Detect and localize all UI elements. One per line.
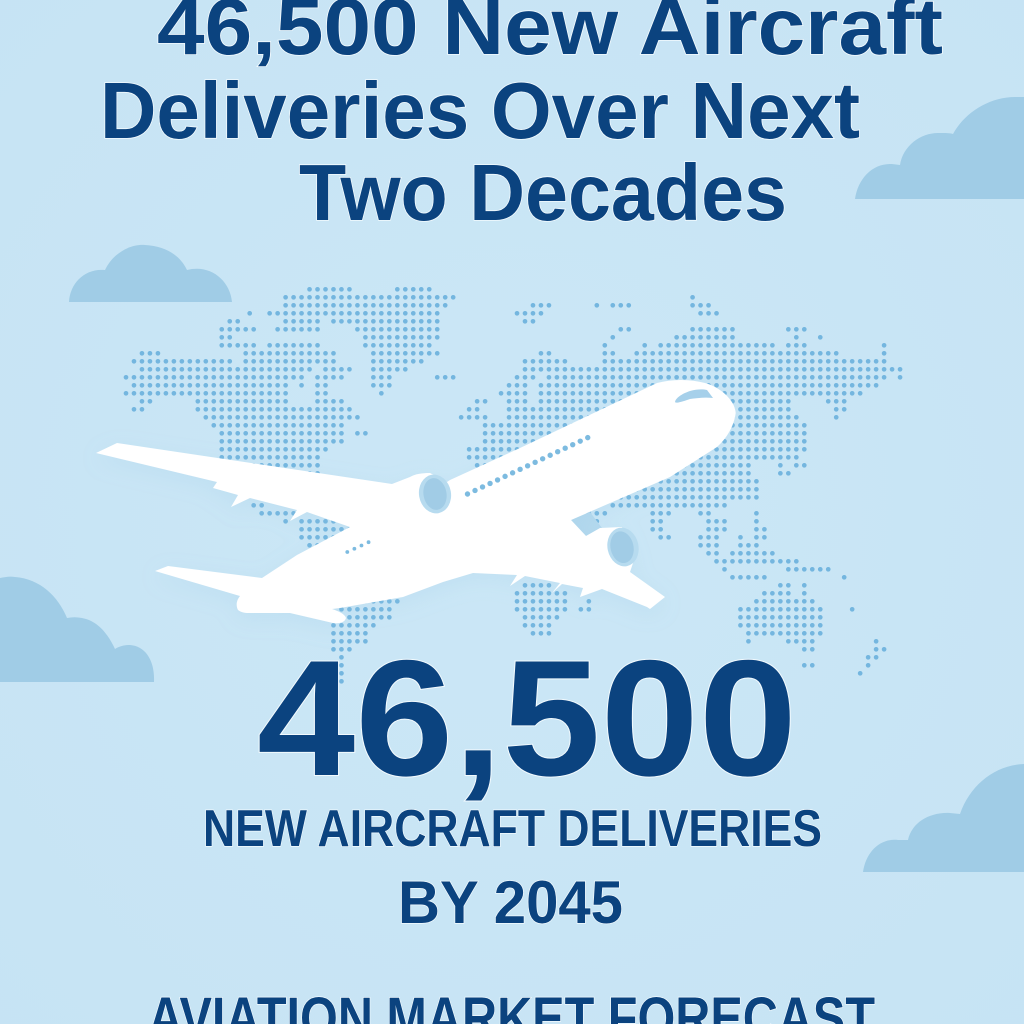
cloud: upper left: [69, 245, 232, 302]
engine: far wing: [604, 525, 642, 569]
cockpit windshield: [675, 389, 713, 403]
cabin windows: rear row: [347, 542, 369, 552]
wing shadow patch: [571, 512, 602, 536]
world map dots: [126, 289, 900, 681]
title: Two Decades: [299, 148, 787, 237]
airplane illustration: [96, 380, 736, 623]
cloud: lower right: [863, 764, 1024, 872]
big number: 46,500: [257, 626, 797, 810]
title: [100, 0, 943, 237]
subtitle: NEW AIRCRAFT DELIVERIES: [203, 800, 822, 858]
cabin windows: forward row: [468, 438, 588, 494]
cloud: top right: [855, 97, 1024, 199]
title: Deliveries Over Next: [100, 66, 860, 155]
subtitle: [203, 800, 822, 936]
engine: near wing: [416, 472, 454, 516]
cloud: lower left: [0, 577, 154, 682]
subtitle: BY 2045: [398, 869, 623, 936]
airplane body and wings: [96, 380, 736, 623]
